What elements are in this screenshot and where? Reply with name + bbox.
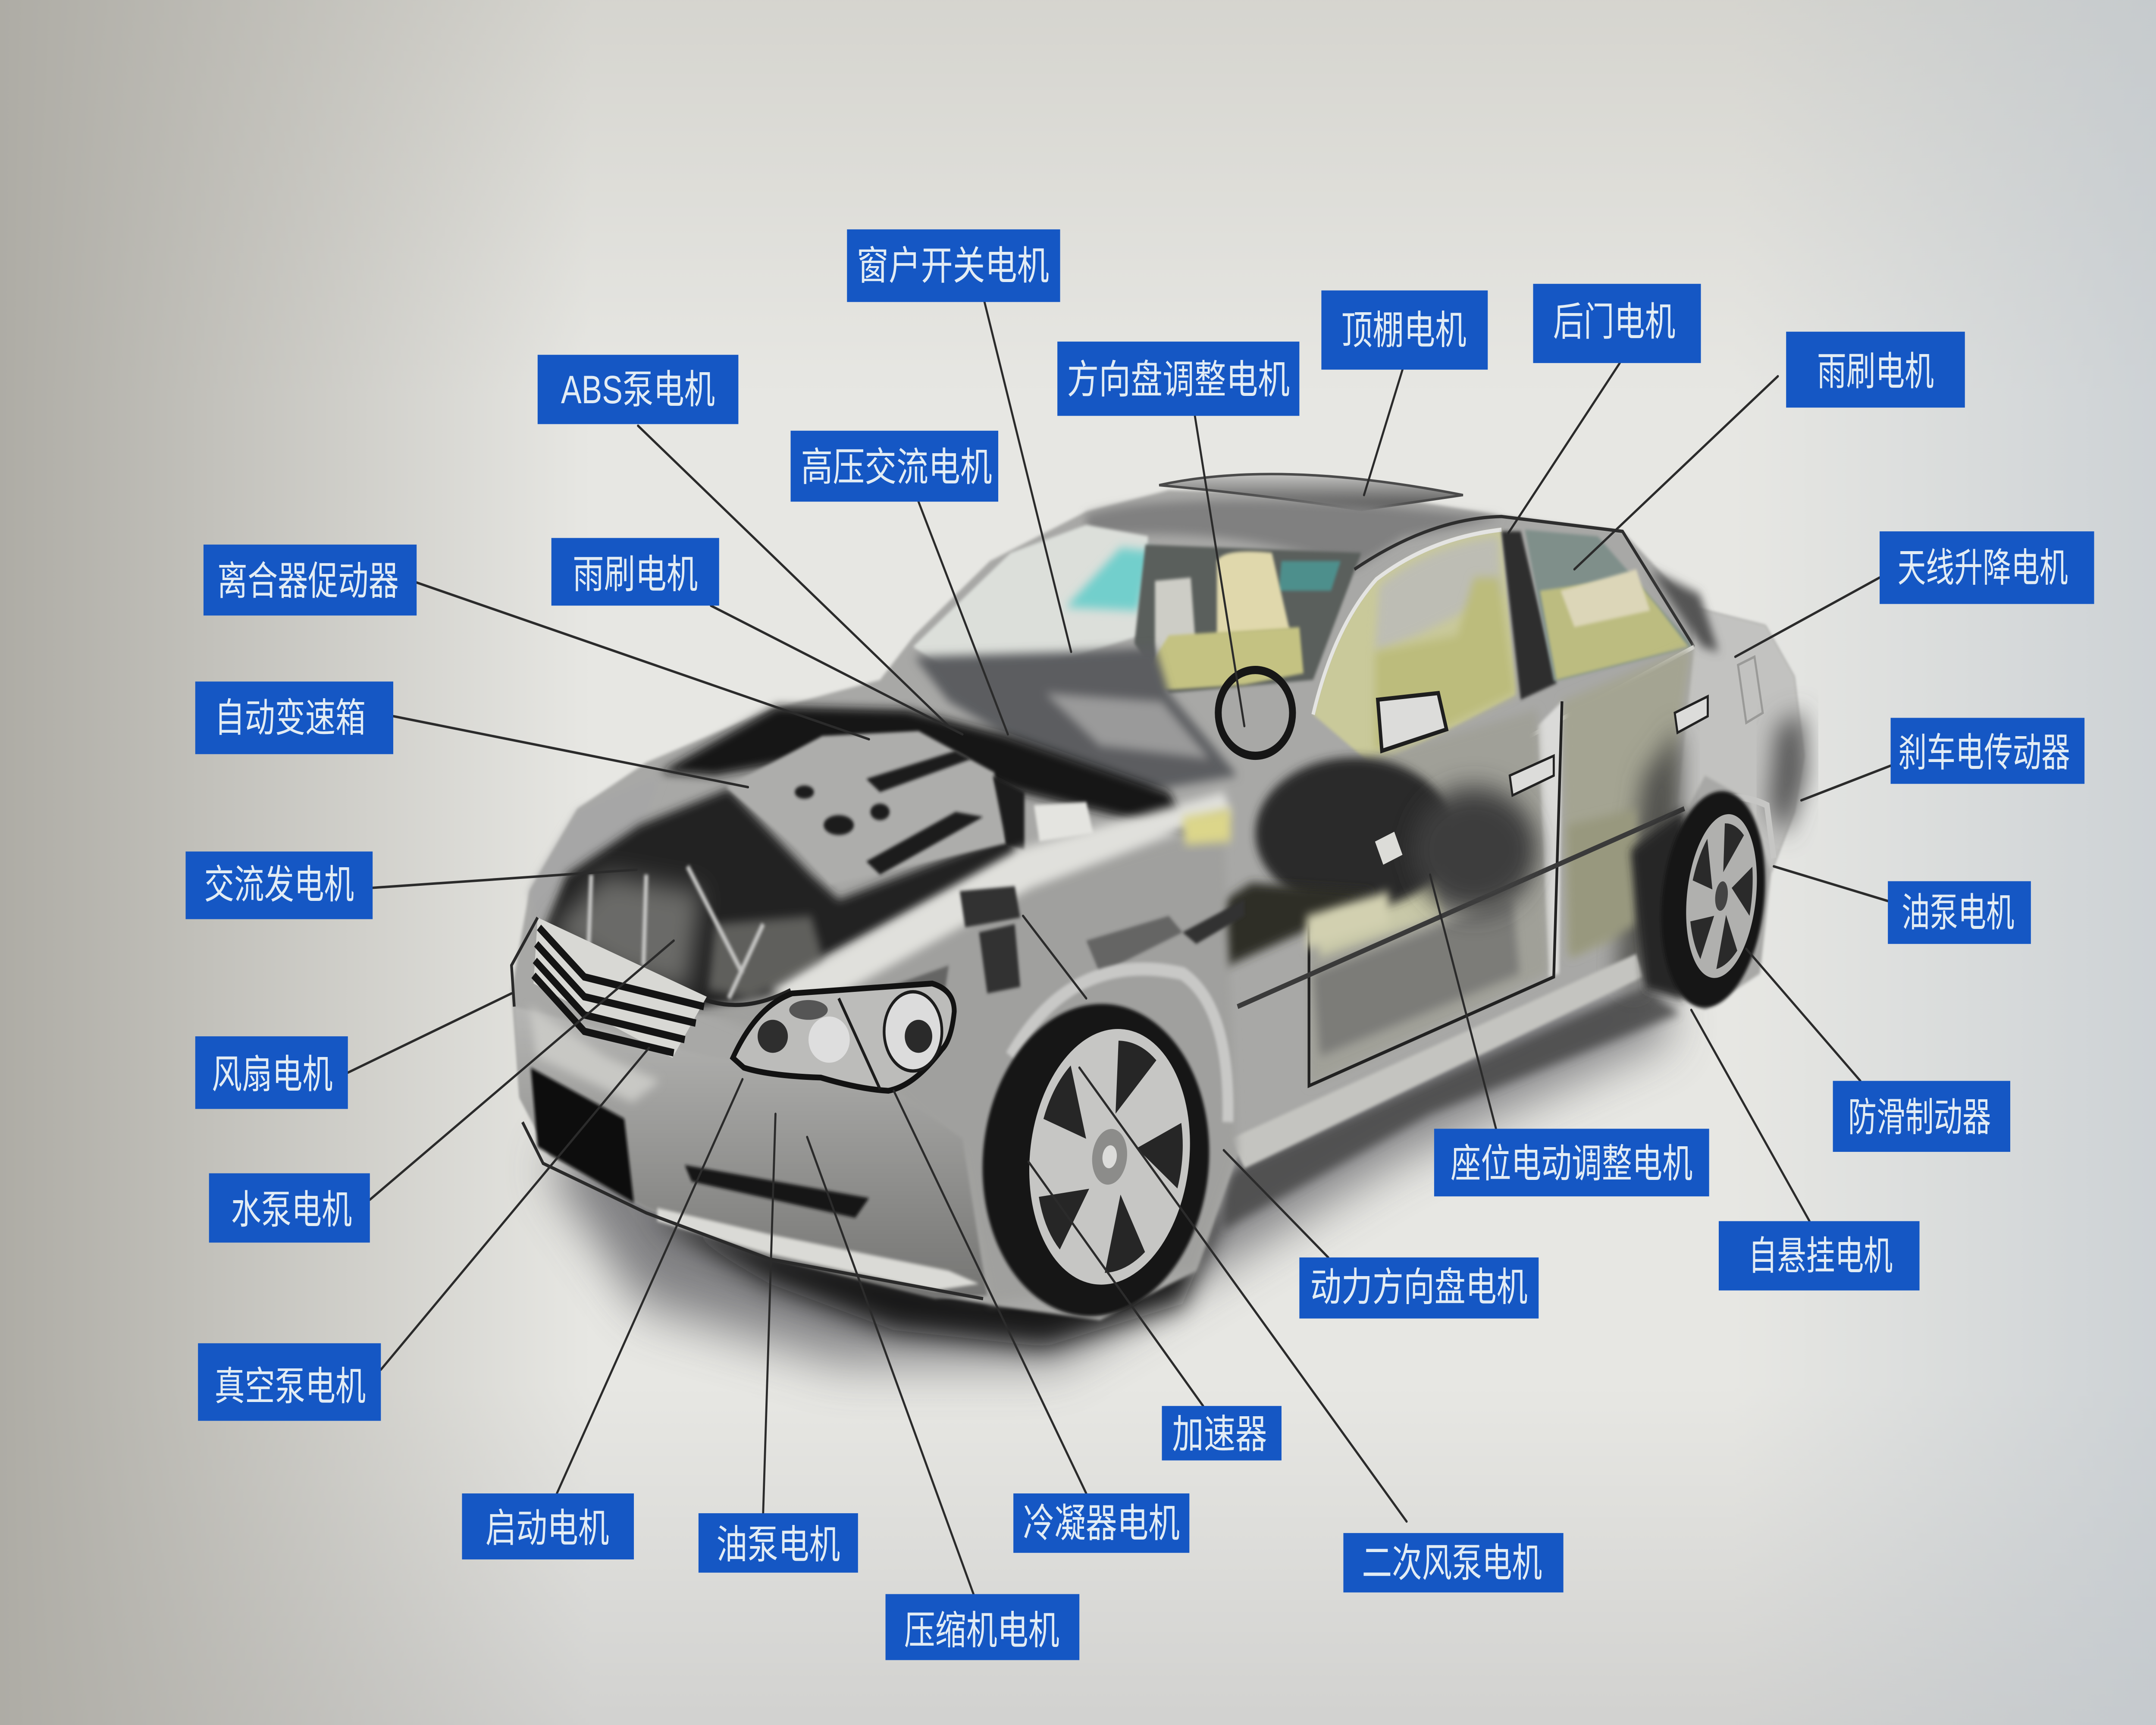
label: 水泵电机 xyxy=(209,1173,370,1242)
label: 真空泵电机 xyxy=(198,1343,381,1421)
fender arch ring xyxy=(1011,969,1228,1122)
label: 交流发电机 xyxy=(185,851,373,919)
door pillar xyxy=(1501,531,1557,699)
tight shadow under bumper xyxy=(646,1204,1224,1346)
label: 真空泵电机: 真空泵电机 xyxy=(214,1364,366,1408)
lower air intake xyxy=(531,1068,634,1203)
fan area xyxy=(708,916,825,998)
label: 压缩机电机: 压缩机电机 xyxy=(904,1608,1059,1653)
label: 自动变速箱 xyxy=(195,681,393,754)
car illustration xyxy=(511,474,1807,1361)
window seat xyxy=(1375,577,1515,751)
label: 加速器 xyxy=(1162,1406,1282,1460)
label: 风扇电机: 风扇电机 xyxy=(212,1052,333,1097)
headlight xyxy=(733,984,954,1091)
bumper lower highlight xyxy=(657,1208,979,1290)
side body stripe xyxy=(1238,809,1684,1007)
label: 二次风泵电机: 二次风泵电机 xyxy=(1362,1540,1542,1585)
door floor yellow xyxy=(1313,875,1444,957)
label: 动力方向盘电机: 动力方向盘电机 xyxy=(1310,1265,1528,1309)
label: 冷凝器电机: 冷凝器电机 xyxy=(1023,1501,1180,1546)
label: 启动电机 xyxy=(462,1493,634,1559)
rear teal glass xyxy=(1279,561,1341,591)
label: 风扇电机 xyxy=(195,1036,348,1109)
rocker panel xyxy=(1231,954,1643,1168)
hood edge shadow xyxy=(660,706,1189,833)
white patch xyxy=(1034,802,1093,842)
leader lines xyxy=(348,302,1891,1594)
front seat headrest xyxy=(1217,552,1290,635)
rear door dark xyxy=(1616,726,1680,990)
rear wheel arch xyxy=(1672,797,1774,858)
label: 加速器: 加速器 xyxy=(1172,1412,1267,1456)
label: 离合器促动器: 离合器促动器 xyxy=(217,558,399,603)
label: 防滑制动器: 防滑制动器 xyxy=(1848,1095,1991,1139)
interior behind windshield xyxy=(1134,545,1361,693)
front bumper xyxy=(514,1007,987,1298)
transparent hood front xyxy=(530,775,660,932)
seat base xyxy=(1134,627,1304,690)
rear tire xyxy=(1650,783,1776,1016)
label: 雨刷电机 (right) xyxy=(1786,332,1965,408)
bumper left highlight xyxy=(530,1007,660,1102)
b-pillar light strip xyxy=(1537,701,1562,977)
rear seat xyxy=(1540,577,1689,680)
radiator interior xyxy=(550,875,701,990)
fog slot xyxy=(685,1165,869,1218)
windshield teal reflection xyxy=(1065,548,1152,611)
rear door floor xyxy=(1567,809,1636,957)
label: 刹车电传动器: 刹车电传动器 xyxy=(1898,730,2070,775)
engine bay xyxy=(543,789,1018,1010)
fender speckles xyxy=(880,886,1244,1056)
label: 启动电机: 启动电机 xyxy=(486,1506,609,1550)
label: 油泵电机 (bottom): 油泵电机 xyxy=(716,1522,840,1567)
seat rail dark mass xyxy=(1411,787,1537,913)
dark pillar blur xyxy=(1650,569,1719,652)
label: 高压交流电机: 高压交流电机 xyxy=(801,445,992,489)
label: 水泵电机: 水泵电机 xyxy=(231,1187,352,1232)
yellow patch xyxy=(1182,809,1231,845)
label: 座位电动调整电机 xyxy=(1434,1129,1709,1196)
trunk lid and quarter panel xyxy=(1675,607,1804,873)
windshield xyxy=(913,525,1148,680)
side shadow xyxy=(1224,987,1680,1229)
label: 油泵电机 (bottom) xyxy=(699,1513,858,1573)
label: 顶棚电机: 顶棚电机 xyxy=(1341,308,1467,352)
ground shadow xyxy=(543,974,1677,1361)
label: 自悬挂电机: 自悬挂电机 xyxy=(1749,1233,1893,1278)
label: 刹车电传动器 xyxy=(1891,718,2084,784)
rear door panel xyxy=(1562,647,1691,957)
label: 压缩机电机 xyxy=(886,1594,1079,1660)
roof side outline xyxy=(1354,517,1694,647)
rear wheel dark well xyxy=(1631,809,1684,1000)
label: 顶棚电机 xyxy=(1321,290,1488,370)
label: 交流发电机: 交流发电机 xyxy=(204,862,354,907)
footwell shadow xyxy=(1182,883,1375,974)
engine bay struts xyxy=(589,866,763,998)
label: 雨刷电机 (left) xyxy=(552,538,719,605)
label: 离合器促动器 xyxy=(204,545,417,615)
label: 窗户开关电机 xyxy=(847,229,1060,302)
label: 后门电机: 后门电机 xyxy=(1553,300,1676,344)
label: 方向盘调整电机: 方向盘调整电机 xyxy=(1067,357,1290,402)
front tire xyxy=(962,982,1230,1338)
floor glow xyxy=(1306,891,1389,949)
engine details xyxy=(795,751,1025,875)
bumper edge xyxy=(523,1122,983,1298)
grille xyxy=(533,918,707,1058)
steering and pedal dark mass xyxy=(1255,757,1454,909)
label: 雨刷电机 (right): 雨刷电机 xyxy=(1817,349,1934,394)
grille frame xyxy=(511,918,538,1007)
rear window xyxy=(1525,530,1694,681)
door outline xyxy=(1309,701,1562,1086)
rear wheel xyxy=(1678,809,1765,984)
engine block xyxy=(726,731,1006,884)
label: ABS泵电机: ABS泵电机 xyxy=(561,367,715,412)
label: 二次风泵电机 xyxy=(1343,1533,1564,1593)
side mirror xyxy=(1378,693,1447,751)
window upper grey xyxy=(1375,536,1501,652)
fender highlight xyxy=(770,792,1231,1010)
beltline highlight xyxy=(1457,647,1694,775)
dashboard lighter details xyxy=(1045,693,1210,759)
quarter dark xyxy=(1768,713,1807,833)
door lower detail xyxy=(1313,899,1520,1056)
label: 动力方向盘电机 xyxy=(1299,1258,1539,1318)
steering wheel xyxy=(1218,670,1292,756)
label: 雨刷电机 (left): 雨刷电机 xyxy=(573,552,698,596)
label: 自悬挂电机 xyxy=(1719,1221,1920,1290)
rear door handle xyxy=(1675,696,1708,733)
window frame highlight xyxy=(1313,530,1501,715)
label: 座位电动调整电机: 座位电动调整电机 xyxy=(1451,1141,1692,1186)
front door handle xyxy=(1510,756,1554,795)
front wheel xyxy=(1013,1013,1206,1300)
label: 高压交流电机 xyxy=(791,431,998,502)
sunroof xyxy=(1159,474,1463,510)
label: 油泵电机 (right) xyxy=(1888,881,2031,944)
label: 油泵电机 (right): 油泵电机 xyxy=(1902,890,2015,935)
front side window xyxy=(1313,530,1515,767)
label: 天线升降电机 xyxy=(1880,531,2094,604)
label: ABS泵电机 xyxy=(538,355,738,424)
label: 后门电机 xyxy=(1533,284,1701,363)
label: 自动变速箱: 自动变速箱 xyxy=(214,696,366,740)
front door panel xyxy=(1309,709,1548,1086)
dashboard xyxy=(915,647,1238,792)
label: 天线升降电机: 天线升降电机 xyxy=(1898,546,2068,590)
hood lip xyxy=(701,990,791,1005)
passenger seat xyxy=(1155,577,1196,660)
rear headrest xyxy=(1561,569,1650,627)
label: 防滑制动器 xyxy=(1833,1081,2010,1152)
fender mid tone xyxy=(701,825,1238,1304)
roof band xyxy=(1086,500,1501,569)
label: 方向盘调整电机 xyxy=(1057,342,1299,416)
car body xyxy=(511,490,1804,1320)
fuel door xyxy=(1738,657,1763,723)
column highlight xyxy=(1375,832,1403,865)
label: 窗户开关电机: 窗户开关电机 xyxy=(857,243,1049,288)
